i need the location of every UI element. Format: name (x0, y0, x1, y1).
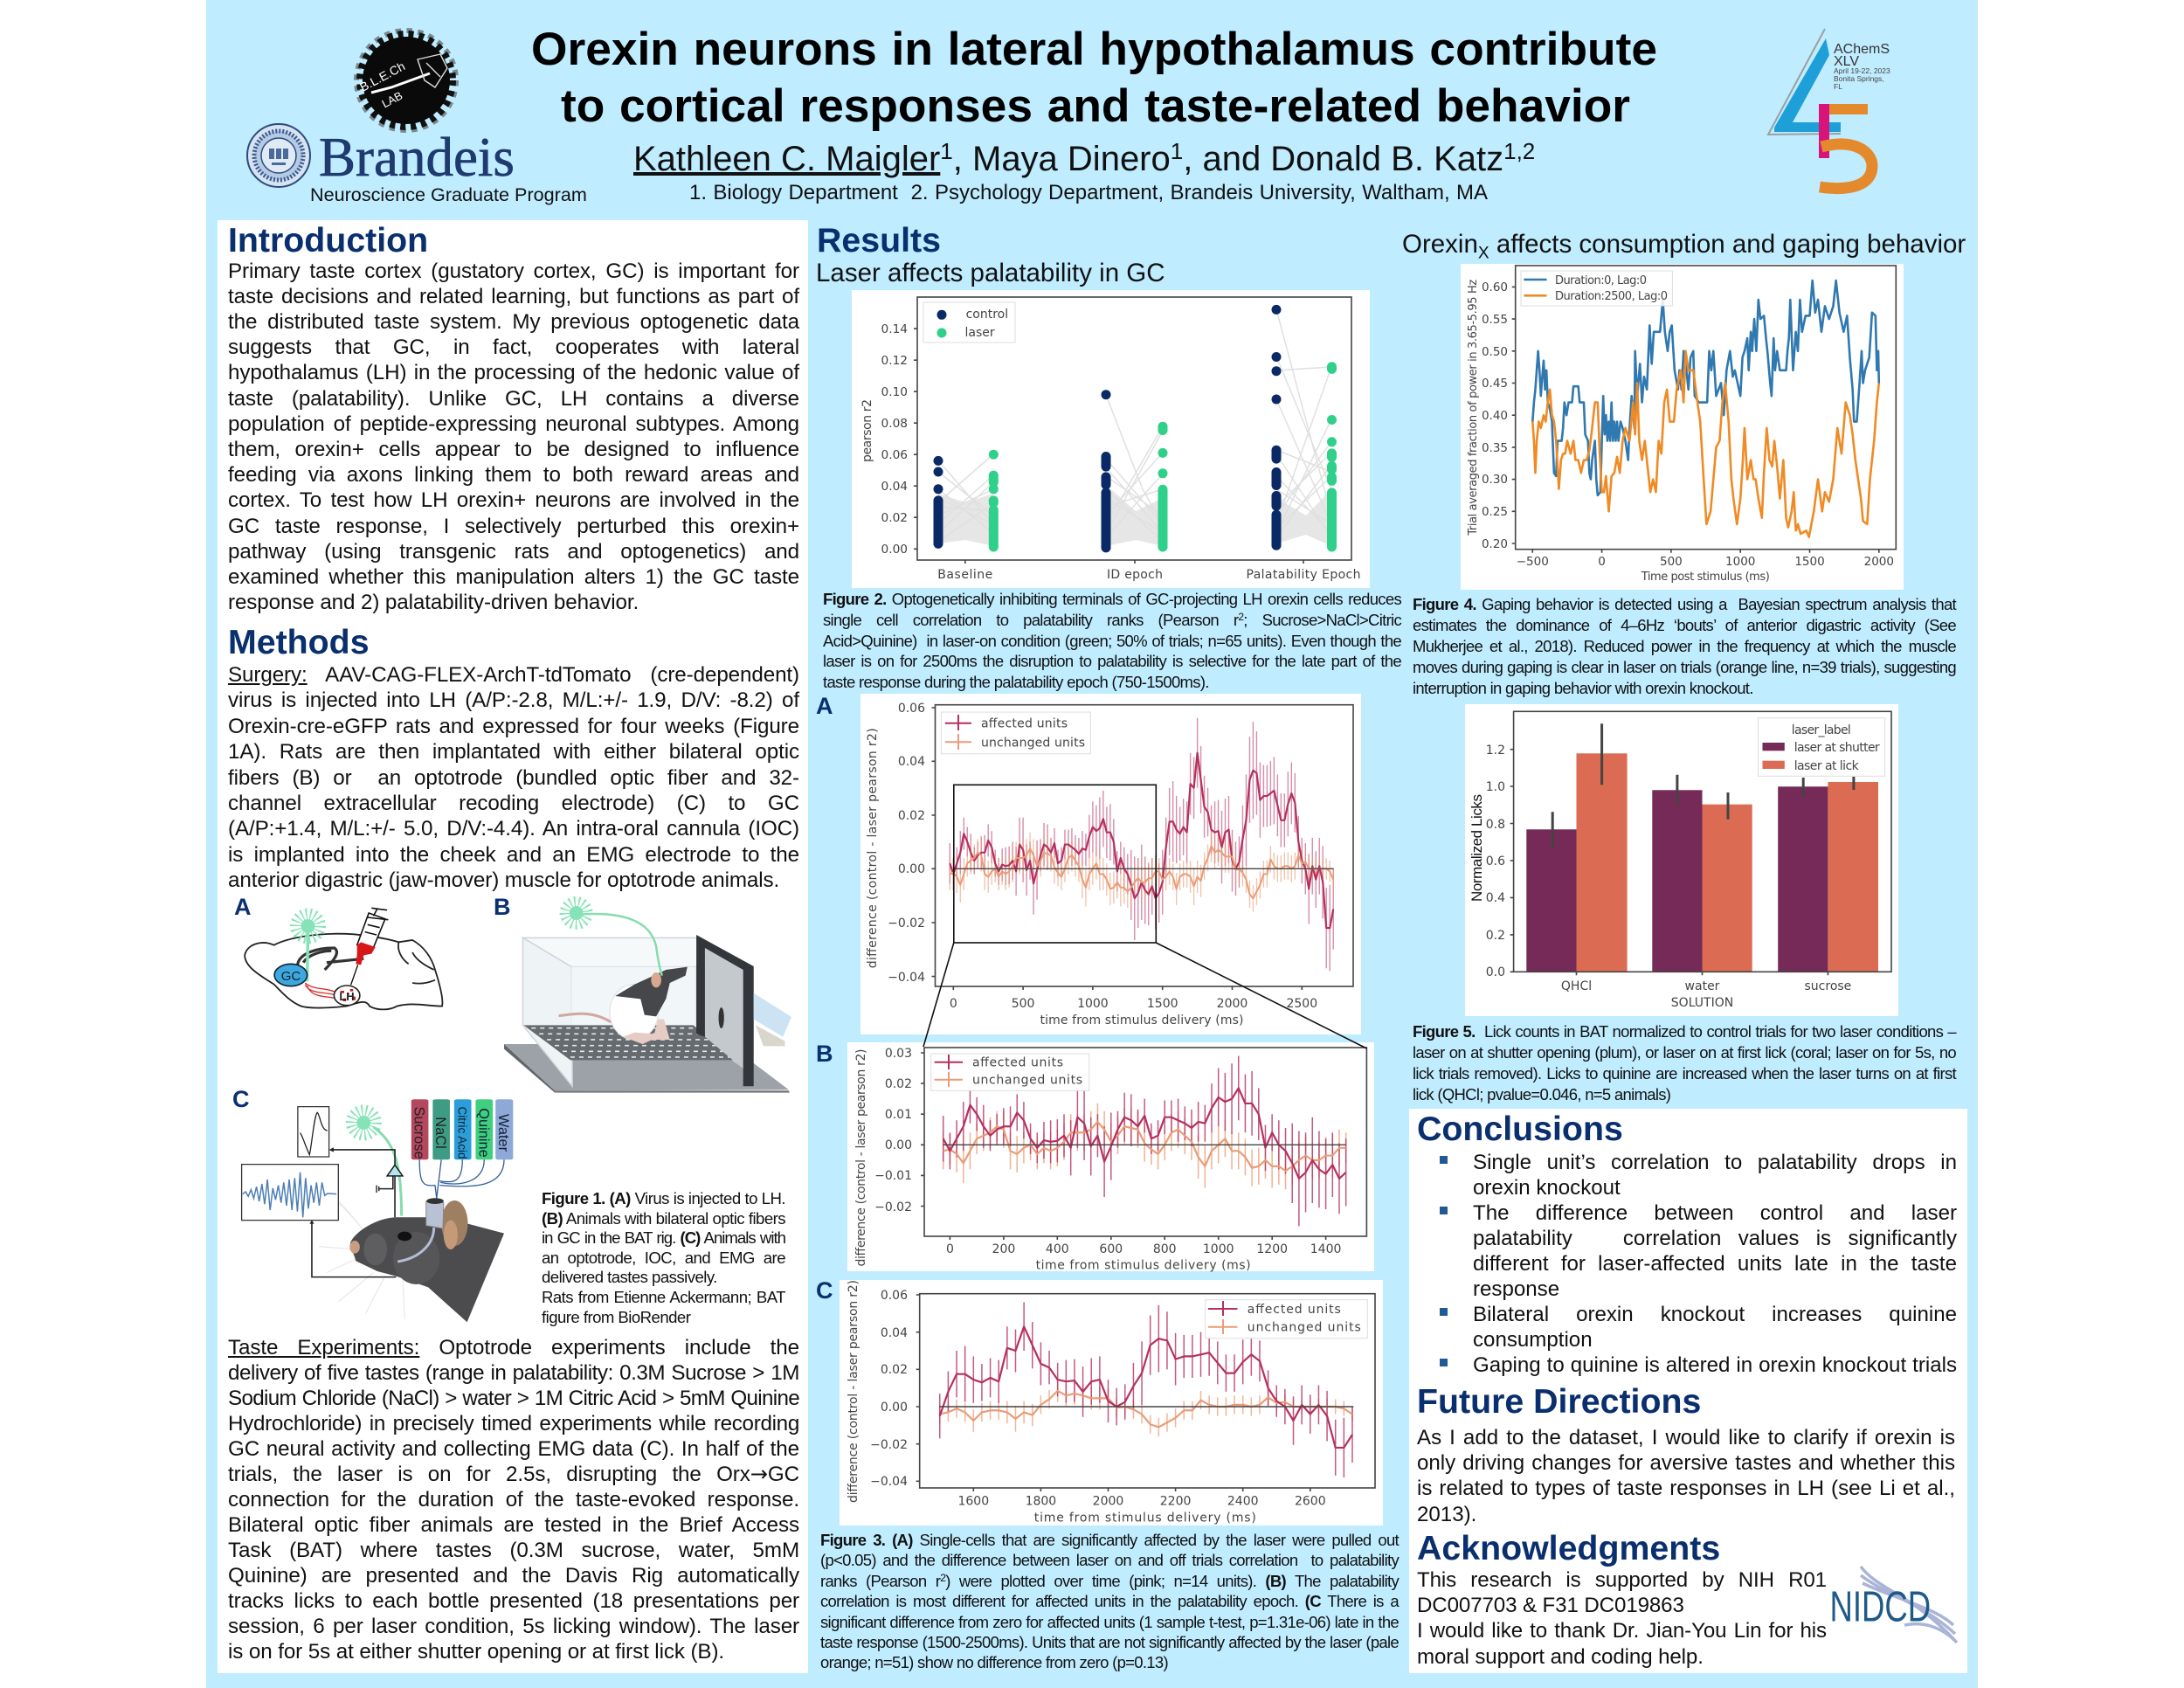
legend (1206, 1300, 1367, 1339)
tick labels: 0.14 (881, 322, 908, 336)
icon: brain injection diagram: GC (281, 969, 301, 984)
caption: figure 5: lick (QHCl; pvalue=0.046, n=5 animals) (1413, 1085, 1670, 1103)
caption: figure 3: (p<0.05) and the difference between laser on and off trials correlation to palatability (820, 1551, 1399, 1569)
icon: conclusion bullets (1440, 1156, 1448, 1366)
text: taste experiments methods: Taste Experiments: Optotrode experiments include the (228, 1336, 799, 1359)
chart: figure 4 gaping power traces (1461, 264, 1904, 590)
tick labels (1482, 280, 1508, 551)
text: taste experiments methods: Quinine) are presented and the Davis Rig automatically (228, 1564, 799, 1588)
tick labels: 0.25 (1482, 505, 1508, 519)
text: introduction body: feeding via axons linking them to both reward areas and (228, 463, 799, 487)
bars: laser at shutter (1526, 786, 1828, 972)
caption: figure 3: Figure 3. (A) Single-cells that are significantly affected by the laser were pulled out (820, 1531, 1399, 1549)
tick labels: 0.12 (881, 354, 908, 368)
caption: figure 2 (823, 590, 1401, 691)
icon: B.L.E.Ch lab badge: B.L.E.Ch (357, 59, 407, 94)
laser points (989, 362, 1337, 552)
panel: left column (218, 220, 808, 1673)
text: conclusions list: response (1473, 1277, 1559, 1301)
legend: laser at lick (1794, 759, 1860, 773)
chart: figure 3B zoomed early response: 800 (1153, 1242, 1177, 1256)
taste bottle labels: Citric Acid (455, 1106, 468, 1159)
icon: brain injection diagram: LH (339, 990, 355, 1003)
caption: figure 2: single cell correlation to palatability ranks (Pearson r2; Sucrose>NaCl>Citric (823, 611, 1401, 629)
axes (1510, 711, 1891, 975)
caption: figure 4: interruption in gaping behavior with orexin knockout. (1413, 679, 1753, 697)
text: surgery methods: anterior digastric (jaw-mover) muscle for optotrode animals. (228, 868, 779, 892)
tick labels: 0.02 (898, 809, 925, 823)
caption: figure 5: laser on at shutter opening (plum), or laser on at first lick (coral; laser on for 5s, no (1413, 1043, 1956, 1062)
chart: figure 2 pearson r2 scatter (852, 290, 1370, 588)
icon: brief access task rig with rat (504, 896, 791, 1093)
legend (923, 302, 1015, 342)
text: introduction body: examined whether this manipulation alters 1) the GC taste (228, 565, 799, 589)
text: introduction body (228, 259, 800, 614)
error bars (1552, 723, 1854, 849)
panel: conclusions column (1409, 1109, 1967, 1673)
tick labels: 0.0 (1486, 965, 1505, 979)
text: introduction body: Primary taste cortex (gustatory cortex, GC) is important for (228, 259, 799, 283)
text: surgery methods (228, 663, 800, 892)
chart: figure 3B zoomed early response: 400 (1046, 1242, 1069, 1256)
data series (943, 1056, 1346, 1226)
chart: figure 3A difference over time: 2500 (1286, 997, 1317, 1011)
text: future directions: only driving changes for aversive tastes and whether this (1417, 1451, 1955, 1475)
chart: figure 3B zoomed early response: 0 (946, 1242, 954, 1256)
tick labels: 0.02 (885, 1077, 912, 1091)
legend: unchanged units (1248, 1321, 1361, 1335)
tick labels: 0.4 (1486, 891, 1505, 905)
title: Orexin neurons in lateral hypothalamus contribute (531, 24, 1657, 75)
text: acknowledgments: I would like to thank Dr. Jian-You Lin for his (1417, 1619, 1827, 1643)
caption: figure 5: lick trials removed). Licks to quinine are increased when the laser turns on at first (1413, 1064, 1956, 1083)
logo: AChemS XLV 45: AChemS (1834, 42, 1890, 57)
text: taste experiments methods: trials, the laser is on for 2.5s, disrupting the Orx→GC (228, 1462, 799, 1486)
tick labels: 0.2 (1486, 929, 1505, 943)
chart: figure 4 gaping power traces: 1500 (1794, 555, 1825, 569)
chart: figure 5 normalized licks bar chart: water (1685, 979, 1720, 993)
tick labels: 0.03 (885, 1047, 912, 1061)
legend (1521, 271, 1672, 306)
icon: laser burst A (297, 915, 320, 937)
chart: figure 3A difference over time: 500 (1012, 997, 1034, 1011)
text: surgery methods: Surgery: AAV-CAG-FLEX-ArchT-tdTomato (cre-dependent) (228, 663, 799, 687)
chart: figure 4 gaping power traces: 1000 (1725, 555, 1755, 569)
axes (921, 1048, 1366, 1240)
authors: Kathleen C. Maigler1, Maya Dinero1, and Donald B. Katz1,2 (633, 138, 1535, 178)
heading: Future Directions: Future Directions (1417, 1382, 1701, 1421)
text: introduction body: population of peptide-expressing neuronal subtypes. Among (228, 412, 799, 436)
text: taste experiments methods: GC neural activity and collecting EMG data (C). In half of the (228, 1437, 799, 1461)
axis labels (866, 728, 1244, 1027)
axis labels: difference (control - laser pearson r2) (854, 1048, 868, 1267)
axis labels: time from stimulus delivery (ms) (1036, 1258, 1251, 1272)
text: conclusions list: different for laser-affected units late in the taste (1473, 1252, 1957, 1276)
text: taste experiments methods: Task (BAT) where tastes (0.3M sucrose, water, 5mM (228, 1539, 799, 1562)
tick labels: −0.02 (874, 1200, 912, 1214)
text: conclusions list: palatability correlation values is significantly (1473, 1227, 1957, 1250)
text: introduction body: taste decisions and related learning, but functions as part of (228, 285, 799, 308)
text: conclusions list: The difference between control and laser (1473, 1201, 1957, 1225)
icon: laser burst C (352, 1111, 375, 1134)
arrow: zoom connector lines from A to B (923, 942, 1367, 1049)
text: acknowledgments: This research is supported by NIH R01 (1417, 1568, 1827, 1592)
caption: figure 4: estimates the dominance of 4–6Hz ‘bouts’ of anterior digastric activity (See (1413, 616, 1956, 634)
text: conclusions list (1473, 1151, 1957, 1377)
tick labels: 0.8 (1486, 818, 1505, 832)
tick labels: 0.50 (1482, 345, 1508, 359)
chart: figure 3B zoomed early response: 1200 (1256, 1242, 1288, 1256)
heading: Results: Results (817, 220, 941, 259)
text: acknowledgments (1417, 1568, 1827, 1669)
axis labels: Time post stimulus (ms) (1641, 571, 1770, 584)
chart: figure 5 normalized licks bar chart (1465, 704, 1898, 1016)
tick labels (1486, 744, 1505, 979)
chart: figure 3B zoomed early response: 600 (1099, 1242, 1123, 1256)
tick labels: 0.06 (898, 702, 925, 716)
text: future directions (1417, 1426, 1955, 1526)
tick labels: −0.02 (870, 1438, 908, 1452)
text: introduction body: taste (palatability). Unlike GC, LH contains a diverse (228, 387, 799, 411)
chart: figure 4 gaping power traces: 0 (1598, 555, 1606, 569)
subheading: laser affects palatability: Laser affects palatability in GC (816, 259, 1165, 287)
tick labels (870, 1289, 908, 1489)
caption: figure 1: delivered tastes passively. (542, 1268, 717, 1286)
axis labels (1467, 280, 1770, 584)
legend: affected units (1248, 1303, 1341, 1317)
tick labels: 1.0 (1486, 780, 1505, 794)
caption: figure 3: taste response (1500-2500ms). Units that are not significantly affected by the laser (pale (820, 1633, 1399, 1651)
tick labels: 0.01 (885, 1108, 912, 1122)
text: taste experiments methods: session, 6 per laser condition, 5s licking window). The laser (228, 1615, 799, 1638)
tick labels: 0.55 (1482, 313, 1508, 327)
caption: figure 1: Figure 1. (A) Virus is injected to LH. (542, 1189, 785, 1207)
category labels: ID epoch (1107, 568, 1163, 582)
text: taste experiments methods: Bilateral optic fiber animals are tested in the Brief Access (228, 1513, 799, 1537)
caption: figure 4 (1413, 595, 1957, 697)
logo: AChemS XLV 45: XLV (1834, 54, 1859, 69)
chart: figure 3C zoomed late response: 2400 (1227, 1494, 1259, 1508)
icon: B.L.E.Ch lab badge (354, 28, 459, 133)
icon: brain injection diagram (244, 907, 444, 1010)
chart: figure 3B zoomed early response: 200 (992, 1242, 1015, 1256)
tick labels: 0.08 (881, 417, 908, 431)
heading: Methods: Methods (228, 623, 370, 661)
text: taste experiments methods: tracks licks to each bottle presented (18 presentations per (228, 1589, 799, 1613)
text: surgery methods: fibers (B) or an optotrode (bundled optic fiber and 32- (228, 766, 799, 790)
text: introduction body: them, orexin+ cells appear to be designed to influence (228, 438, 799, 461)
tick labels: 0.00 (898, 862, 925, 876)
text: taste experiments methods: Sodium Chloride (NaCl) > water > 1M Citric Acid > 5mM Quinine (228, 1387, 799, 1410)
icon: B.L.E.Ch lab badge: LAB (380, 89, 404, 110)
chart: figure 3C zoomed late response: 2000 (1093, 1494, 1123, 1508)
category labels (937, 568, 1361, 582)
tick labels: 0.04 (898, 755, 925, 769)
tick labels: 0.06 (881, 448, 908, 462)
category labels: Baseline (937, 568, 992, 582)
chart: figure 4 gaping power traces: 2000 (1864, 555, 1894, 569)
caption: figure 1: in GC in the BAT rig. (C) Animals with (542, 1228, 785, 1247)
caption: figure 2: Figure 2. Optogenetically inhibiting terminals of GC-projecting LH orexin cells reduces (823, 590, 1401, 608)
chart: figure 4 gaping power traces: −500 (1517, 555, 1549, 569)
chart: figure 3C zoomed late response: 2200 (1160, 1494, 1191, 1508)
tick labels: 0.6 (1486, 854, 1505, 868)
tick labels: 0.00 (885, 1138, 912, 1152)
text: graduate program: Neuroscience Graduate Program (310, 183, 587, 205)
tick labels: −0.04 (870, 1475, 908, 1489)
taste bottle labels: Sucrose (411, 1106, 427, 1159)
caption: figure 1: (B) Animals with bilateral optic fibers (542, 1209, 785, 1228)
legend: unchanged units (981, 736, 1085, 750)
icon: laser burst B (566, 903, 587, 924)
text: conclusions list: Single unit’s correlation to palatability drops in (1473, 1151, 1957, 1174)
data series (1532, 280, 1879, 537)
text: surgery methods: channel extracellular recoding electrode) (C) to GC (228, 792, 799, 815)
text: surgery methods: virus is injected into LH (A/P:-2.8, M/L:+/- 1.9, D/V: -8.2) of (228, 688, 799, 712)
label: figure 1 C: C (232, 1086, 250, 1112)
control points (933, 305, 1281, 552)
logo: AChemS XLV 45 (1766, 28, 1890, 194)
tick labels: 0.20 (1482, 537, 1508, 551)
caption: figure 3: significant difference from zero for affected units (1 sample t-test, p=1.31e-06) late in the (820, 1613, 1399, 1631)
chart: figure 3B zoomed early response (847, 1042, 1374, 1272)
text: taste experiments methods (228, 1336, 799, 1664)
caption: figure 1: figure from BioRender (542, 1308, 690, 1326)
chart: figure 5 normalized licks bar chart: SOLUTION (1671, 996, 1733, 1010)
text: conclusions list: Bilateral orexin knockout increases quinine (1473, 1303, 1957, 1326)
axis labels (854, 1048, 1251, 1272)
chart: figure 3A difference over time: 0 (950, 997, 957, 1011)
text: taste experiments methods: connection for the duration of the taste-evoked response. (228, 1488, 799, 1512)
caption: figure 4: Figure 4. Gaping behavior is detected using a Bayesian spectrum analysis that (1413, 595, 1956, 613)
text: surgery methods: 1A). Rats are then implantated with either bilateral optic (228, 740, 799, 764)
logo: Brandeis wordmark: Brandeis (319, 127, 515, 188)
tick labels: −0.01 (874, 1169, 912, 1183)
caption: figure 2: taste response during the palatability epoch (750-1500ms). (823, 673, 1209, 691)
tick labels: 0.10 (881, 385, 908, 399)
tick labels: −0.02 (888, 917, 925, 930)
chart: figure 3A difference over time: 1500 (1147, 997, 1178, 1011)
caption: figure 2: Acid>Quinine) in laser-on condition (green; 50% of trials; n=65 units). Even though the (823, 632, 1401, 650)
axis labels: time from stimulus delivery (ms) (1034, 1512, 1256, 1525)
legend (931, 1054, 1089, 1090)
caption: figure 5 (1413, 1022, 1957, 1103)
text: future directions: is related to types of taste responses in LH (see Li et al., (1417, 1477, 1955, 1500)
chart: figure 3C zoomed late response: 2600 (1295, 1494, 1326, 1508)
tick labels: 0.00 (881, 543, 908, 557)
legend (941, 712, 1090, 754)
tick labels: 0.02 (881, 511, 908, 525)
text: future directions: As I add to the dataset, I would like to clarify if orexin is (1417, 1426, 1955, 1449)
heading: Conclusions: Conclusions (1417, 1110, 1623, 1148)
tick labels: 0.04 (881, 480, 908, 494)
legend: affected units (972, 1056, 1063, 1070)
heading: Introduction: Introduction (228, 221, 428, 259)
chart: figure 3C zoomed late response: 1800 (1026, 1494, 1056, 1508)
text: conclusions list: consumption (1473, 1328, 1593, 1352)
tick labels: 0.40 (1482, 409, 1508, 423)
subheading: consumption and gaping: OrexinX affects consumption and gaping behavior (1402, 230, 1966, 263)
legend: laser_label (1792, 723, 1851, 737)
tick labels: 0.60 (1482, 280, 1508, 294)
axis labels: time from stimulus delivery (ms) (1040, 1013, 1244, 1027)
caption: figure 3 (820, 1531, 1400, 1671)
legend: Duration:2500, Lag:0 (1555, 290, 1668, 303)
chart: figure 5 normalized licks bar chart: sucrose (1805, 979, 1851, 993)
icon: optotrode recording diagram (241, 1099, 514, 1323)
taste bottle labels: Quinine (475, 1108, 491, 1158)
axis labels: difference (control - laser pearson r2) (866, 728, 880, 968)
taste bottle labels: Water (495, 1114, 511, 1152)
caption: figure 2: laser is on for 2500ms the disruption to palatability is selective for the late part of the (823, 652, 1401, 670)
text: introduction body: GC taste response, I selectively perturbed this orexin+ (228, 515, 799, 538)
logo: AChemS XLV 45: FL (1834, 82, 1842, 91)
connecting lines (938, 309, 1331, 546)
legend: laser at shutter (1794, 741, 1880, 755)
text: surgery methods: is implanted into the cheek and an EMG electrode to the (228, 843, 799, 867)
category labels: Palatability Epoch (1246, 568, 1361, 582)
tick labels (888, 702, 925, 985)
chart: figure 3C zoomed late response (840, 1280, 1383, 1525)
caption: figure 1: Rats from Etienne Ackermann; BAT (542, 1288, 785, 1306)
text: acknowledgments: moral support and coding help. (1417, 1645, 1704, 1669)
tick labels: 0.30 (1482, 473, 1508, 487)
legend: Duration:0, Lag:0 (1555, 274, 1647, 287)
logo: NIDCD: NIDCD (1829, 1583, 1931, 1630)
bars: laser at lick (1576, 753, 1878, 972)
label: figure 3 A: A (816, 693, 833, 719)
caption: figure 4: Mukherjee et al., 2018). Reduced power in the frequency at which the muscle (1413, 637, 1956, 655)
caption: figure 1: an optotrode, IOC, and EMG are (542, 1249, 785, 1267)
legend: laser (964, 326, 995, 340)
text: taste experiments methods: is on for 5s at either shutter opening or at first lick (B). (228, 1640, 724, 1664)
axis labels (847, 1280, 1256, 1525)
inset selection box (954, 785, 1156, 943)
text: introduction body: pathway (using transgenic rats and optogenetics) and (228, 540, 799, 564)
data series (950, 718, 1333, 971)
axis labels: difference (control - laser pearson r2) (847, 1280, 860, 1503)
caption: figure 4: moves during gaping is clear in laser on trials (orange line, n=39 trials), suggesting (1413, 658, 1956, 676)
chart: figure 3C zoomed late response: 1600 (957, 1494, 989, 1508)
affiliations: 1. Biology Department 2. Psychology Department, Brandeis University, Waltham, MA (689, 181, 1488, 204)
text: taste experiments methods: Hydrochloride) in precisely timed experiments while recording (228, 1412, 799, 1435)
chart: figure 3B zoomed early response: 1400 (1310, 1242, 1341, 1256)
legend (1758, 718, 1885, 776)
logo: AChemS XLV 45: Bonita Springs, (1834, 74, 1884, 83)
chart: figure 3A difference over time (860, 694, 1361, 1034)
icon: Brandeis seal (246, 123, 311, 188)
logo: NIDCD (1829, 1566, 1959, 1643)
title: to cortical responses and taste-related behavior (561, 80, 1630, 132)
tick labels: 1.2 (1486, 744, 1505, 758)
axes (1512, 266, 1896, 553)
taste bottle labels (411, 1106, 511, 1159)
caption: figure 3: orange; n=51) show no difference from zero (p=0.13) (820, 1653, 1168, 1671)
tick labels: 0.02 (881, 1363, 908, 1377)
label: figure 1 B: B (494, 894, 510, 920)
text: surgery methods: Orexin-cre-eGFP rats and expressed for four weeks (Figure (228, 715, 799, 738)
text: introduction body: response and 2) palatability-driven behavior. (228, 591, 639, 614)
label: figure 3 C: C (816, 1277, 833, 1304)
chart: figure 5 normalized licks bar chart: QHCl (1561, 979, 1592, 993)
text: future directions: 2013). (1417, 1503, 1476, 1526)
caption: figure 3: correlation is most different for affected units in the palatability epoch. (C There is a (820, 1592, 1399, 1610)
text: introduction body: suggests that GC, in fact, cooperates with lateral (228, 336, 799, 359)
axes (916, 1294, 1375, 1491)
axes (931, 705, 1353, 990)
legend: unchanged units (972, 1074, 1082, 1088)
text: introduction body: hypothalamus (LH) in the processing of the hedonic value of (228, 361, 799, 384)
text: conclusions list: Gaping to quinine is altered in orexin knockout trials (1473, 1353, 1957, 1377)
label: figure 1 A: A (234, 894, 252, 920)
tick labels: 0.00 (881, 1401, 908, 1415)
y axis label: Normalized Licks (1469, 794, 1485, 902)
tick labels: 0.35 (1482, 441, 1508, 455)
tick labels: 0.45 (1482, 377, 1508, 391)
data series (940, 1303, 1352, 1477)
caption: figure 1 (542, 1189, 786, 1326)
tick labels (874, 1047, 912, 1214)
heading: Acknowledgments: Acknowledgments (1417, 1529, 1720, 1567)
title (531, 24, 1657, 132)
taste bottle labels: NaCl (432, 1117, 448, 1149)
text: conclusions list: orexin knockout (1473, 1176, 1621, 1200)
tick labels: 0.04 (881, 1326, 908, 1340)
caption: figure 3: ranks (Pearson r2) were plotted over time (pink; n=14 units). (B) The palatability (820, 1572, 1399, 1590)
logo: AChemS XLV 45: April 19-22, 2023 (1834, 66, 1890, 75)
legend: control (966, 308, 1008, 322)
caption: figure 5: Figure 5. Lick counts in BAT normalized to control trials for two laser conditions – (1413, 1022, 1956, 1041)
text: acknowledgments: DC007703 & F31 DC019863 (1417, 1594, 1684, 1617)
tick labels (881, 322, 908, 557)
text: taste experiments methods: delivery of five tastes (range in palatability: 0.3M Sucrose > 1M (228, 1361, 799, 1385)
text: introduction body: cortex. To test how LH orexin+ neurons are involved in the (228, 488, 799, 512)
text: introduction body: the distributed taste system. My previous optogenetic data (228, 310, 799, 334)
legend: affected units (981, 717, 1068, 731)
axes and ticks (914, 297, 1351, 564)
tick labels: 0.06 (881, 1289, 908, 1303)
y axis label: pearson r2 (860, 399, 874, 462)
chart: figure 3B zoomed early response: 1000 (1203, 1242, 1234, 1256)
chart: figure 3A difference over time: 1000 (1077, 997, 1109, 1011)
chart: figure 4 gaping power traces: 500 (1660, 555, 1683, 569)
chart: figure 3A difference over time: 2000 (1217, 997, 1248, 1011)
axis labels: Trial averaged fraction of power in 3.65-5.95 Hz (1467, 280, 1480, 536)
text: surgery methods: (A/P:+1.4, M/L:+/- 5.0, D/V:-4.4). An intra-oral cannula (IOC) (228, 817, 799, 841)
tick labels: −0.04 (888, 971, 925, 985)
label: figure 3 B: B (816, 1041, 833, 1067)
